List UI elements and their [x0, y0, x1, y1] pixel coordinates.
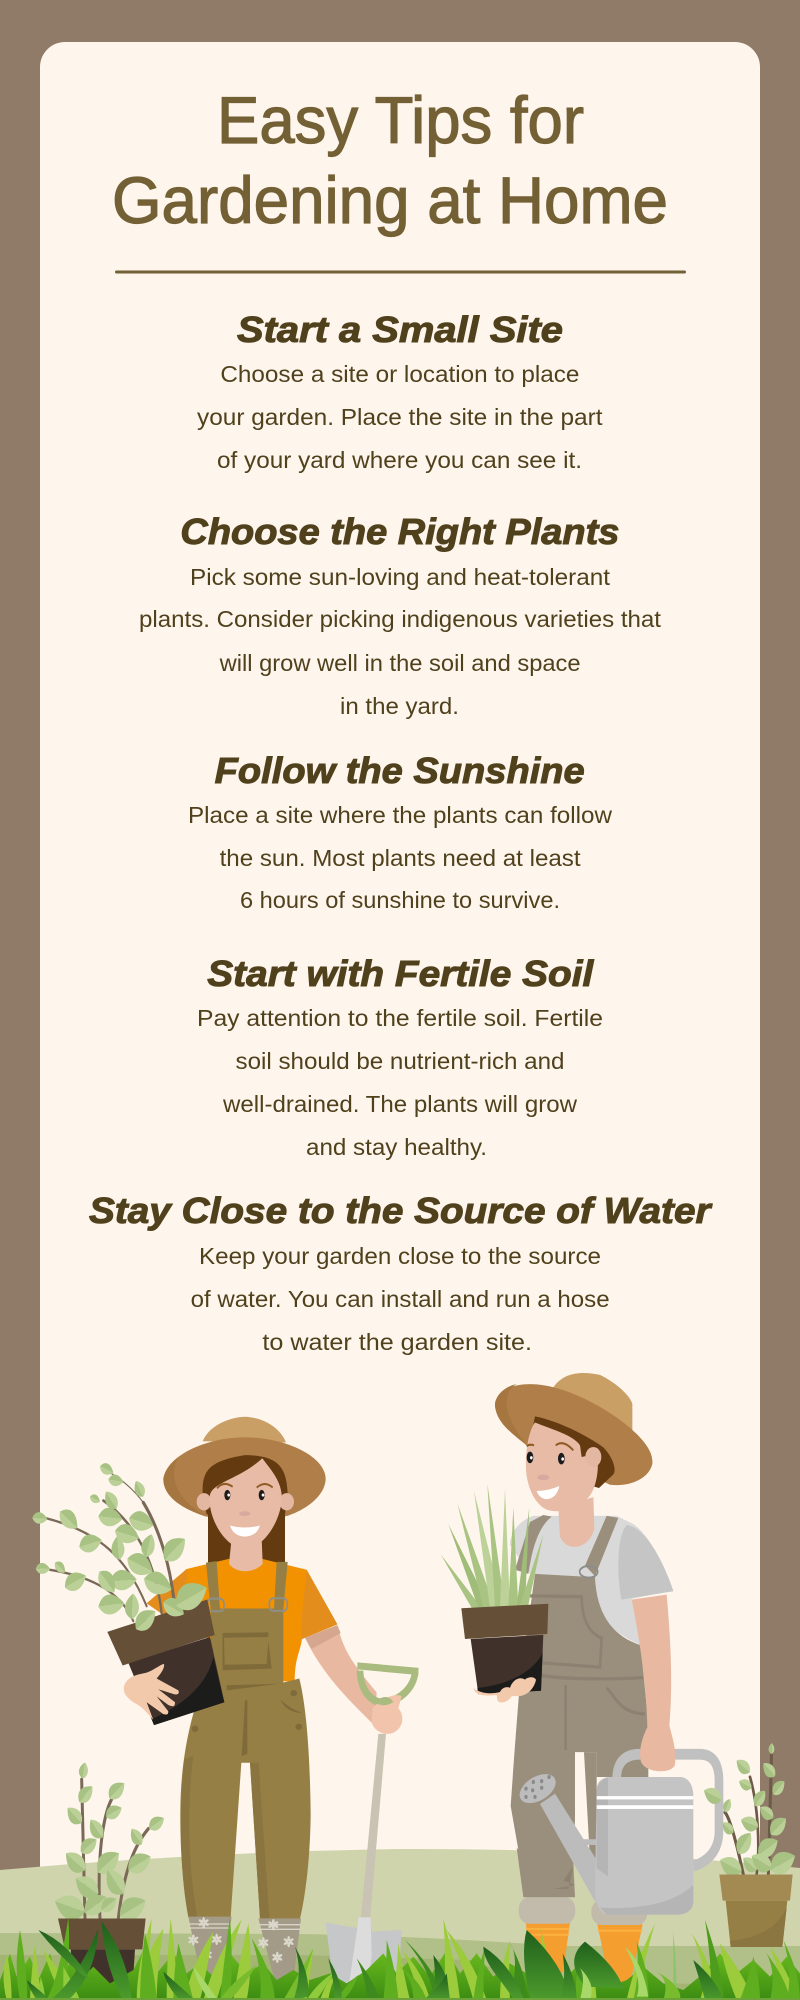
body text: tip 2	[139, 564, 662, 719]
title: Gardening at Home	[112, 163, 668, 237]
body text: tip 4	[197, 1005, 603, 1160]
body text: tip 2: plants. Consider picking indigenous varieties that	[139, 606, 662, 632]
left sock	[188, 1917, 232, 1987]
body text: tip 4: soil should be nutrient-rich and	[236, 1048, 564, 1074]
body text: tip 3: Place a site where the plants can follow	[188, 802, 612, 828]
right sock	[258, 1918, 301, 1988]
body text: tip 1: your garden. Place the site in the part	[197, 404, 603, 430]
arm with hand	[632, 1595, 675, 1771]
body text: tip 1	[197, 361, 603, 473]
body text: tip 1: of your yard where you can see it.	[217, 447, 582, 473]
watering can	[516, 1754, 719, 1915]
neck	[229, 1538, 263, 1571]
body text: tip 3: 6 hours of sunshine to survive.	[240, 887, 560, 913]
small potted plant, bottom left	[52, 1761, 167, 2000]
heading: stay close to the source of water: Stay Close to the Source of Water	[89, 1190, 713, 1231]
illustration: woman gardener	[32, 1417, 419, 1920]
body text: tip 3	[188, 802, 612, 913]
ground: lawn bands	[0, 1933, 800, 2000]
cuffs and boots	[519, 1897, 647, 1984]
neck	[558, 1497, 594, 1547]
body text: tip 3: the sun. Most plants need at least	[220, 845, 581, 871]
body text: tip 4: well-drained. The plants will grow	[222, 1091, 577, 1117]
panel: tip 2	[139, 511, 662, 719]
head	[526, 1416, 615, 1511]
body text: tip 1: Choose a site or location to place	[220, 361, 579, 387]
ground: hill	[0, 1849, 800, 2000]
potted plant leaves	[32, 1461, 211, 1636]
hand on pot	[124, 1664, 179, 1720]
body text: tip 4: and stay healthy.	[306, 1134, 487, 1160]
body text: tip 2: will grow well in the soil and space	[219, 650, 581, 676]
body text: tip 2: in the yard.	[340, 693, 459, 719]
heading: choose the right plants: Choose the Right Plants	[180, 511, 619, 552]
title	[112, 83, 668, 237]
t-shirt	[147, 1559, 337, 1681]
body text: tip 2: Pick some sun-loving and heat-tolerant	[190, 564, 611, 590]
bottom edge strip	[0, 1998, 800, 2000]
held pot with grass plant	[441, 1483, 548, 1694]
heading: start with fertile soil: Start with Fertile Soil	[207, 953, 594, 994]
overalls	[180, 1561, 311, 1919]
panel: tip 1	[197, 309, 603, 473]
head	[197, 1455, 294, 1549]
panel: tip 3	[188, 750, 612, 913]
body text: tip 5: Keep your garden close to the source	[199, 1243, 601, 1269]
woman's socks and shovel blade	[188, 1917, 402, 2000]
body text: tip 5: of water. You can install and run a hose	[191, 1286, 610, 1312]
potted plant stems	[47, 1474, 174, 1621]
body text: tip 5: to water the garden site.	[262, 1329, 532, 1355]
heading: follow the sunshine: Follow the Sunshine	[215, 750, 585, 791]
heading: start a small site: Start a Small Site	[237, 309, 563, 350]
panel: tip 4	[197, 953, 603, 1160]
grey t-shirt	[510, 1516, 673, 1645]
title: Easy Tips for	[217, 83, 584, 157]
straw hat	[495, 1373, 652, 1485]
hand under pot	[473, 1677, 536, 1702]
straw hat	[163, 1417, 326, 1517]
sock stripes and flowers	[188, 1917, 301, 1963]
hair back	[208, 1499, 285, 1564]
shovel blade	[326, 1917, 402, 2000]
body text: tip 5	[191, 1243, 610, 1355]
panel: tip 5	[89, 1190, 713, 1355]
body text: tip 4: Pay attention to the fertile soil. Fertile	[197, 1005, 603, 1031]
overalls	[511, 1515, 648, 1897]
foreground grass	[0, 1917, 800, 2000]
plant in ochre pot, bottom right	[701, 1743, 798, 1947]
held flower pot	[107, 1599, 224, 1725]
shovel grip over hand	[375, 1697, 393, 1705]
hand on shovel	[372, 1695, 402, 1734]
grass base tufts	[0, 1950, 800, 2000]
illustration: man gardener	[441, 1373, 798, 1984]
shovel	[357, 1662, 419, 1920]
arm with hand	[305, 1625, 377, 1726]
